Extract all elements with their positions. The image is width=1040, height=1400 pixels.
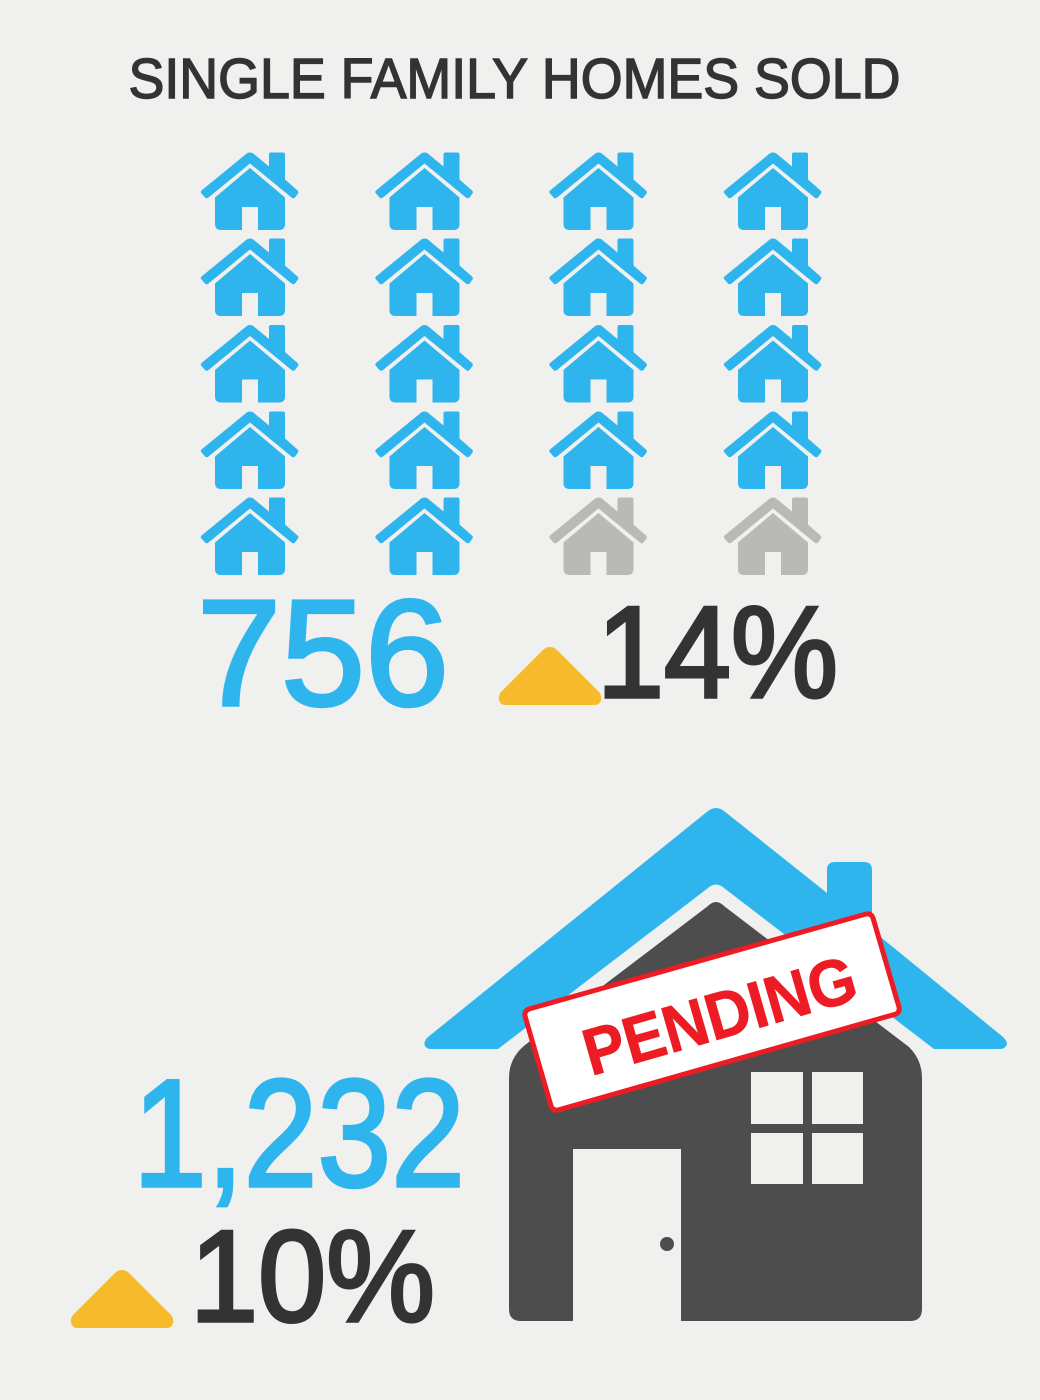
icon column 4 — [724, 152, 821, 575]
house body — [509, 902, 922, 1321]
change: homes sold: 14% — [597, 579, 838, 725]
icon column 2 — [375, 152, 473, 575]
icon column 3 — [549, 152, 647, 575]
illustration: pending house — [424, 808, 1007, 1321]
icon column 1 — [201, 152, 298, 575]
pictogram: homes sold grid — [201, 152, 821, 575]
roof — [424, 808, 1007, 1049]
door knob — [660, 1237, 674, 1251]
window — [751, 1072, 863, 1184]
icon: up triangle — [499, 647, 601, 705]
title: SINGLE FAMILY HOMES SOLD — [128, 47, 900, 111]
change: pending: 10% — [190, 1203, 435, 1349]
icon: up triangle — [71, 1270, 173, 1328]
sign: pending: PENDING — [574, 941, 865, 1089]
sign: pending — [525, 914, 899, 1110]
number: pending: 1,232 — [133, 1048, 465, 1219]
number: homes sold: 756 — [197, 568, 449, 737]
